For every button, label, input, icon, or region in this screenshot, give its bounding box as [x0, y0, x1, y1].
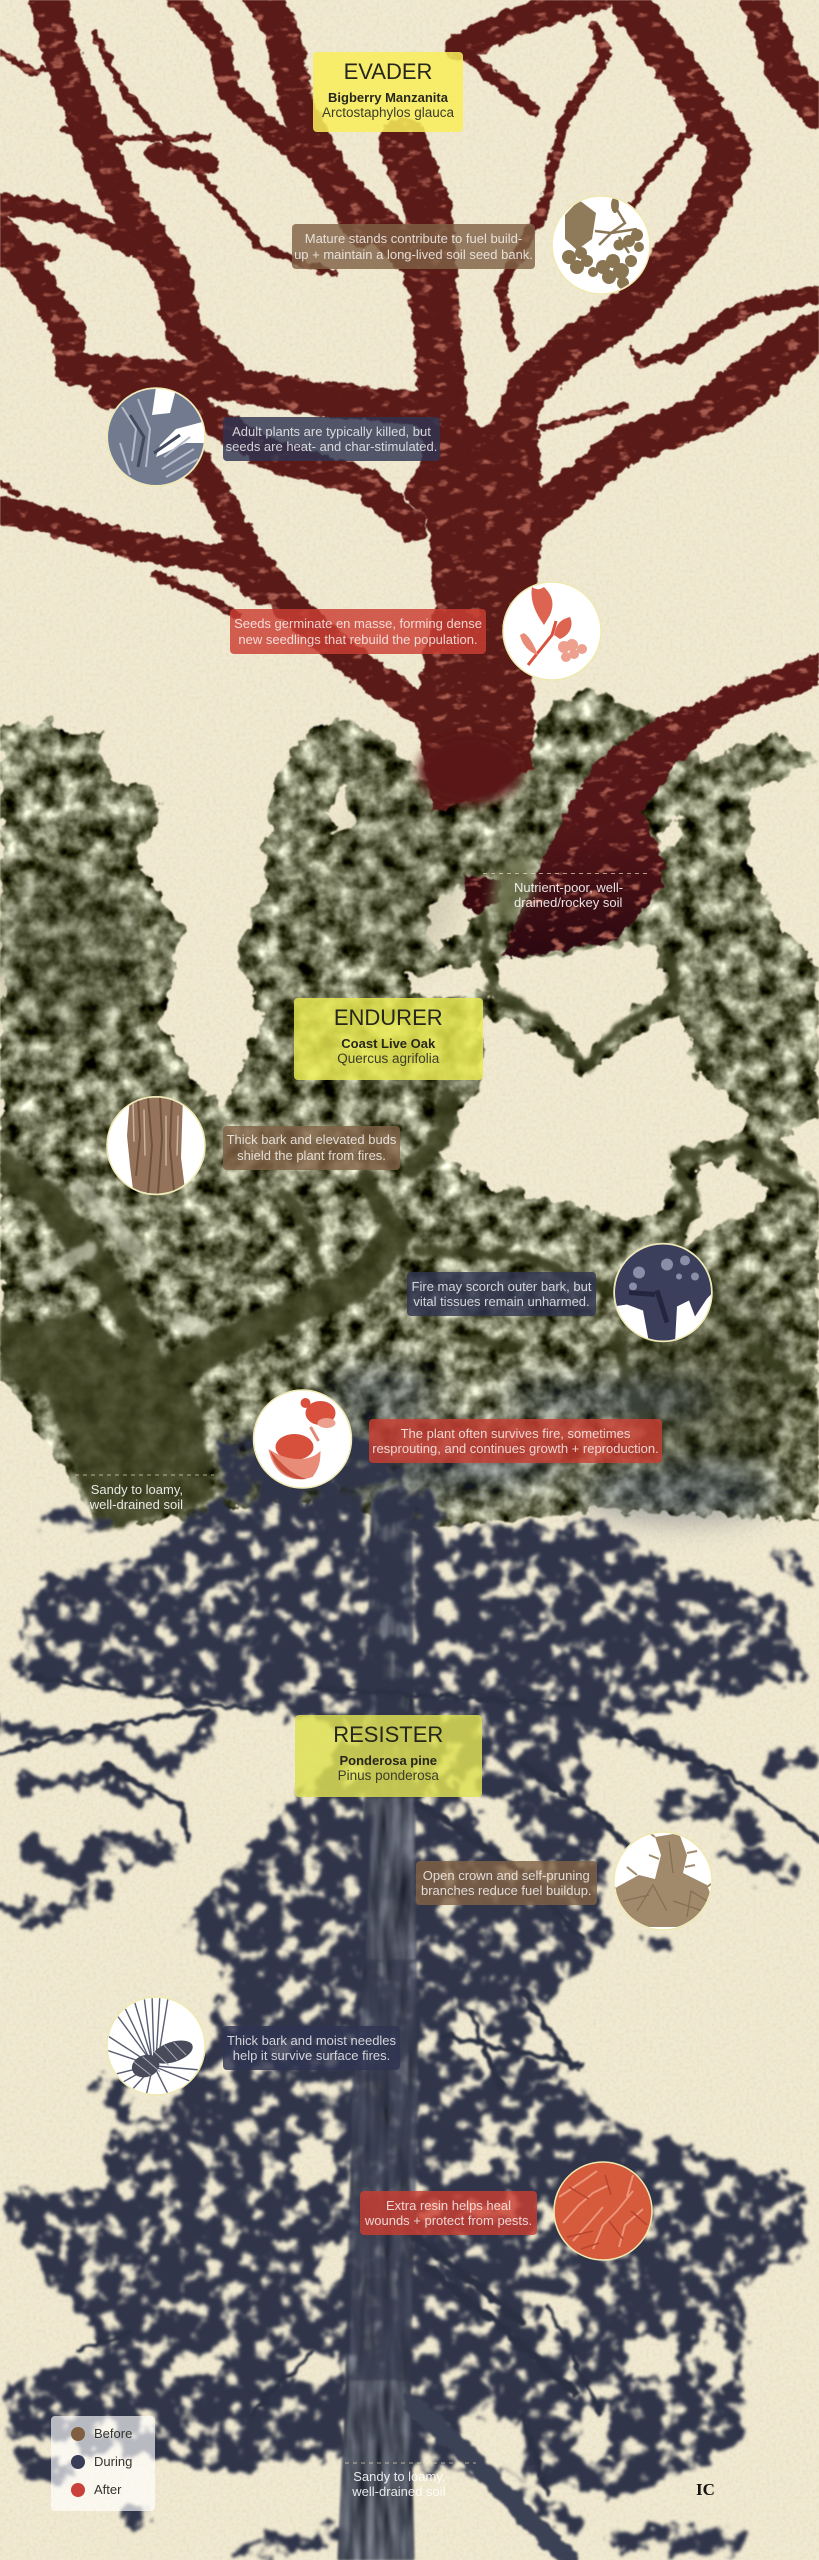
- text: evader after: Seeds germinate en masse, forming dense: [234, 616, 482, 631]
- icon: seedling: [503, 582, 601, 680]
- text: resister before: Open crown and self-pruning: [423, 1868, 590, 1883]
- panel: Endurer title: Coast Live Oak: [341, 1036, 435, 1051]
- text: endurer before: shield the plant from fires.: [237, 1148, 386, 1163]
- text: resister soil: Sandy to loamy,: [353, 2468, 446, 2484]
- text: resister soil: well-drained soil: [352, 2484, 446, 2498]
- text: evader before: [292, 224, 535, 269]
- text: evader after: new seedlings that rebuild the population.: [238, 632, 478, 646]
- text: endurer after: [369, 1419, 662, 1463]
- text: evader after: [230, 609, 486, 654]
- text: resister during: [223, 2026, 400, 2070]
- icon: acorns: [254, 1390, 352, 1488]
- text: resister before: branches reduce fuel buildup.: [421, 1883, 592, 1898]
- text: endurer before: [223, 1126, 400, 1170]
- icon: resinous bark: [554, 2162, 652, 2260]
- panel: Resister title: Ponderosa pine: [339, 1753, 437, 1768]
- legend: Before: [94, 2426, 132, 2441]
- legend: During: [94, 2454, 132, 2469]
- icon: manzanita berries: [552, 196, 650, 294]
- text: endurer during: Fire may scorch outer bark, but: [412, 1279, 591, 1294]
- text: evader during: [223, 417, 440, 461]
- text: resister after: [360, 2191, 537, 2235]
- panel: Evader title: EVADER: [344, 59, 432, 84]
- icon: pine cone and needles: [106, 1994, 205, 2096]
- text: endurer soil: well-drained soil: [90, 1496, 183, 1512]
- panel: Evader title: Arctostaphylos glauca: [322, 105, 454, 120]
- panel: Endurer title: ENDURER: [334, 1005, 443, 1030]
- text: endurer during: [407, 1272, 596, 1316]
- text: evader before: Mature stands contribute to fuel build-: [305, 231, 522, 246]
- text: evader during: Adult plants are typically killed, but: [232, 424, 431, 439]
- text: evader soil: Nutrient-poor, well-: [514, 880, 623, 894]
- text: endurer before: Thick bark and elevated buds: [227, 1132, 396, 1147]
- text: endurer soil: Sandy to loamy,: [91, 1482, 183, 1496]
- text: resister during: Thick bark and moist needles: [227, 2033, 396, 2048]
- panel: Endurer title: Quercus agrifolia: [337, 1051, 439, 1066]
- tree: bigberry manzanita: [0, 0, 819, 958]
- panel: Endurer title: [294, 998, 483, 1080]
- panel: Evader title: Bigberry Manzanita: [328, 90, 448, 105]
- panel: Evader title: [313, 52, 463, 132]
- icon: burnt branch: [106, 387, 206, 487]
- text: endurer after: resprouting, and continues growth + reproduction.: [372, 1441, 659, 1456]
- text: resister during: help it survive surface fires.: [233, 2048, 390, 2063]
- logo: IC: [696, 2480, 715, 2499]
- icon: scorched trunk: [613, 1242, 713, 1342]
- panel: Resister title: RESISTER: [333, 1722, 443, 1747]
- legend: [51, 2416, 155, 2511]
- text: resister before: [416, 1861, 596, 1905]
- text: endurer soil: [90, 1482, 183, 1512]
- tree: coast live oak: [0, 694, 819, 1532]
- icon: oak bark: [107, 1096, 205, 1198]
- text: evader soil: [514, 880, 623, 910]
- panel: Resister title: [294, 1715, 482, 1797]
- text: evader during: seeds are heat- and char-stimulated.: [226, 439, 437, 454]
- panel: Resister title: Pinus ponderosa: [338, 1768, 439, 1783]
- text: endurer after: The plant often survives fire, sometimes: [401, 1426, 630, 1441]
- text: resister after: wounds + protect from pests.: [365, 2213, 532, 2228]
- dashed soil lines: [75, 874, 650, 2463]
- text: endurer during: vital tissues remain unharmed.: [413, 1294, 590, 1309]
- legend: After: [94, 2482, 121, 2497]
- text: evader soil: drained/rockey soil: [514, 894, 622, 910]
- icon: pine crown: [613, 1831, 713, 1931]
- tree: ponderosa pine: [0, 1368, 819, 2560]
- text: resister after: Extra resin helps heal: [386, 2198, 511, 2213]
- text: resister soil: [352, 2468, 446, 2498]
- text: evader before: up + maintain a long-lived soil seed bank.: [294, 246, 533, 262]
